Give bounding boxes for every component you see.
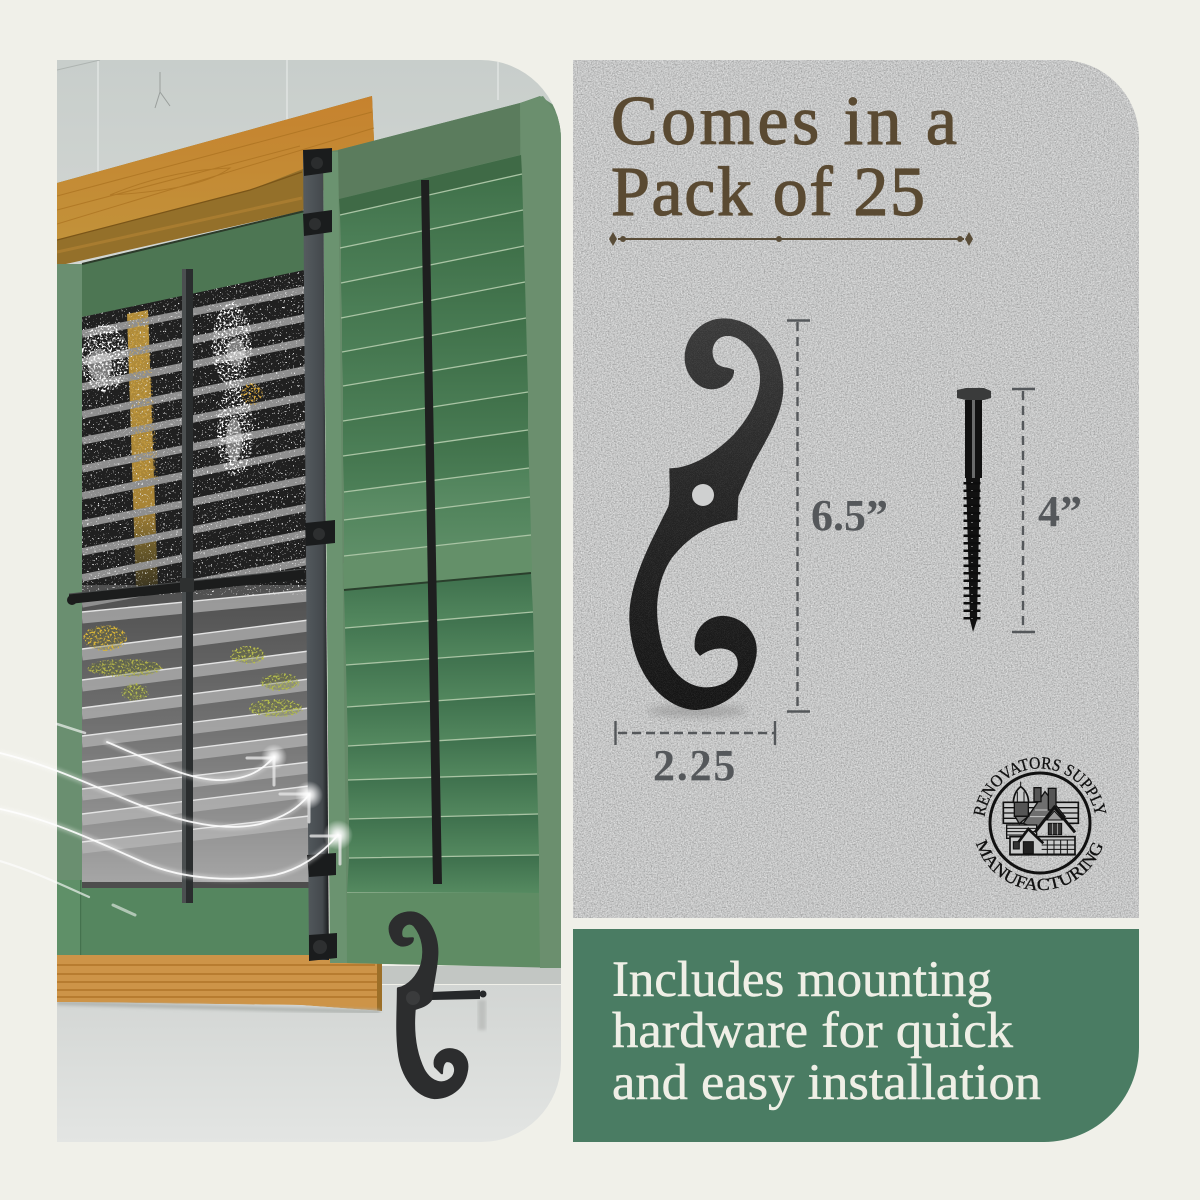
ornamental divider <box>609 232 973 246</box>
height dimension 6.5 <box>787 320 888 712</box>
window center rod <box>67 269 305 903</box>
panel: product dimensions <box>573 60 1139 918</box>
lower wall <box>57 966 561 1142</box>
upper slats <box>82 289 309 604</box>
logo: Renovators Supply Manufacturing: MANUFACTURING <box>976 838 1102 891</box>
panel: shutter photo <box>57 60 561 1142</box>
sill wood <box>57 955 382 1011</box>
latch bar with brackets <box>303 148 337 961</box>
lag screw product image <box>957 388 991 632</box>
S-hook product image <box>629 318 783 717</box>
wall siding <box>57 60 561 280</box>
heading: Comes in a <box>611 83 957 160</box>
right shutter <box>323 96 561 968</box>
sparse speckles <box>82 270 310 595</box>
left green window frame <box>57 211 312 964</box>
wind arrows <box>0 724 353 915</box>
logo: Renovators Supply Manufacturing: RENOVATORS SUPPLY <box>973 757 1107 817</box>
white speckles <box>81 303 253 476</box>
width dimension 2.25 <box>616 721 775 790</box>
panel: mounting hardware callout <box>573 929 1139 1142</box>
logo: Renovators Supply Manufacturing <box>973 757 1107 891</box>
screw dimension 4 <box>1012 389 1082 632</box>
foliage reflections <box>83 310 304 717</box>
callout text: Includes mounting <box>612 952 992 1008</box>
mounted S-hook with lag screw <box>390 913 486 1098</box>
callout text <box>612 952 1041 1111</box>
heading: Pack of 25 <box>611 154 925 231</box>
width dimension 2.25: 2.25 <box>653 741 737 790</box>
upper louvers <box>339 155 532 590</box>
shutter tilt rod <box>421 180 442 884</box>
screw dimension 4: 4” <box>1038 487 1082 536</box>
heading <box>611 83 957 231</box>
callout text: hardware for quick <box>612 1003 1014 1059</box>
top wood header <box>57 96 374 266</box>
height dimension 6.5: 6.5” <box>811 491 888 540</box>
golden reflection <box>127 310 158 590</box>
bright speckle cores <box>88 338 245 462</box>
lower slats <box>82 590 309 848</box>
window with louvers behind glass <box>81 260 310 890</box>
callout text: and easy installation <box>612 1055 1041 1111</box>
house illustration <box>1003 782 1078 855</box>
lower louvers <box>344 573 539 893</box>
